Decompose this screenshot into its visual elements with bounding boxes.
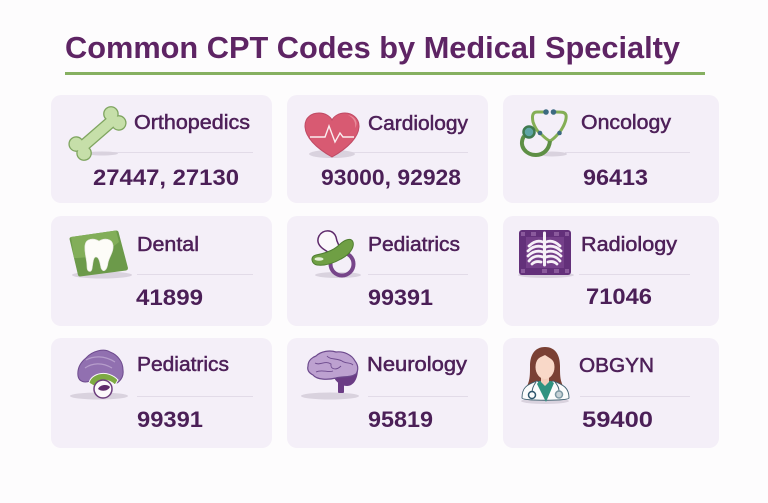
codes: pediatrics second: 99391 (137, 407, 203, 432)
panel: obgyn (503, 338, 719, 448)
label: pediatrics second: Pediatrics (137, 354, 229, 376)
label: neurology: Neurology (367, 354, 467, 376)
codes: obgyn: 59400 (582, 407, 653, 432)
label: cardiology: Cardiology (368, 113, 468, 135)
icon: brain with pacifier (78, 350, 123, 398)
icon: bone (67, 105, 128, 162)
codes: pediatrics: 99391 (368, 285, 433, 310)
panel: neurology (287, 338, 488, 448)
icon: pacifier (312, 231, 354, 276)
codes: neurology: 95819 (368, 407, 433, 432)
codes: oncology: 96413 (583, 165, 648, 190)
panel: cardiology (287, 95, 488, 203)
codes: radiology: 71046 (586, 284, 652, 309)
icon: tooth x-ray (70, 230, 128, 276)
codes: orthopedics: 27447, 27130 (93, 165, 239, 190)
label: orthopedics: Orthopedics (134, 112, 250, 134)
label: radiology: Radiology (581, 234, 677, 256)
panel: oncology (503, 95, 719, 203)
panel: radiology (503, 216, 719, 326)
icon: brain (308, 351, 358, 393)
title: Common CPT Codes by Medical Specialty (65, 30, 681, 65)
icon: doctor (522, 347, 569, 402)
panel: pediatrics (287, 216, 488, 326)
panel: dental (51, 216, 272, 326)
label: oncology: Oncology (581, 112, 671, 134)
label: obgyn: OBGYN (579, 355, 654, 377)
codes: cardiology: 93000, 92928 (321, 165, 461, 190)
icon: chest x-ray (519, 230, 571, 275)
icon: heart (305, 113, 359, 157)
panel: orthopedics (51, 95, 272, 203)
panel: pediatrics second (51, 338, 272, 448)
label: pediatrics: Pediatrics (368, 234, 460, 256)
codes: dental: 41899 (136, 285, 203, 310)
label: dental: Dental (137, 234, 199, 256)
icon: stethoscope (522, 109, 566, 155)
title underline (65, 72, 705, 75)
